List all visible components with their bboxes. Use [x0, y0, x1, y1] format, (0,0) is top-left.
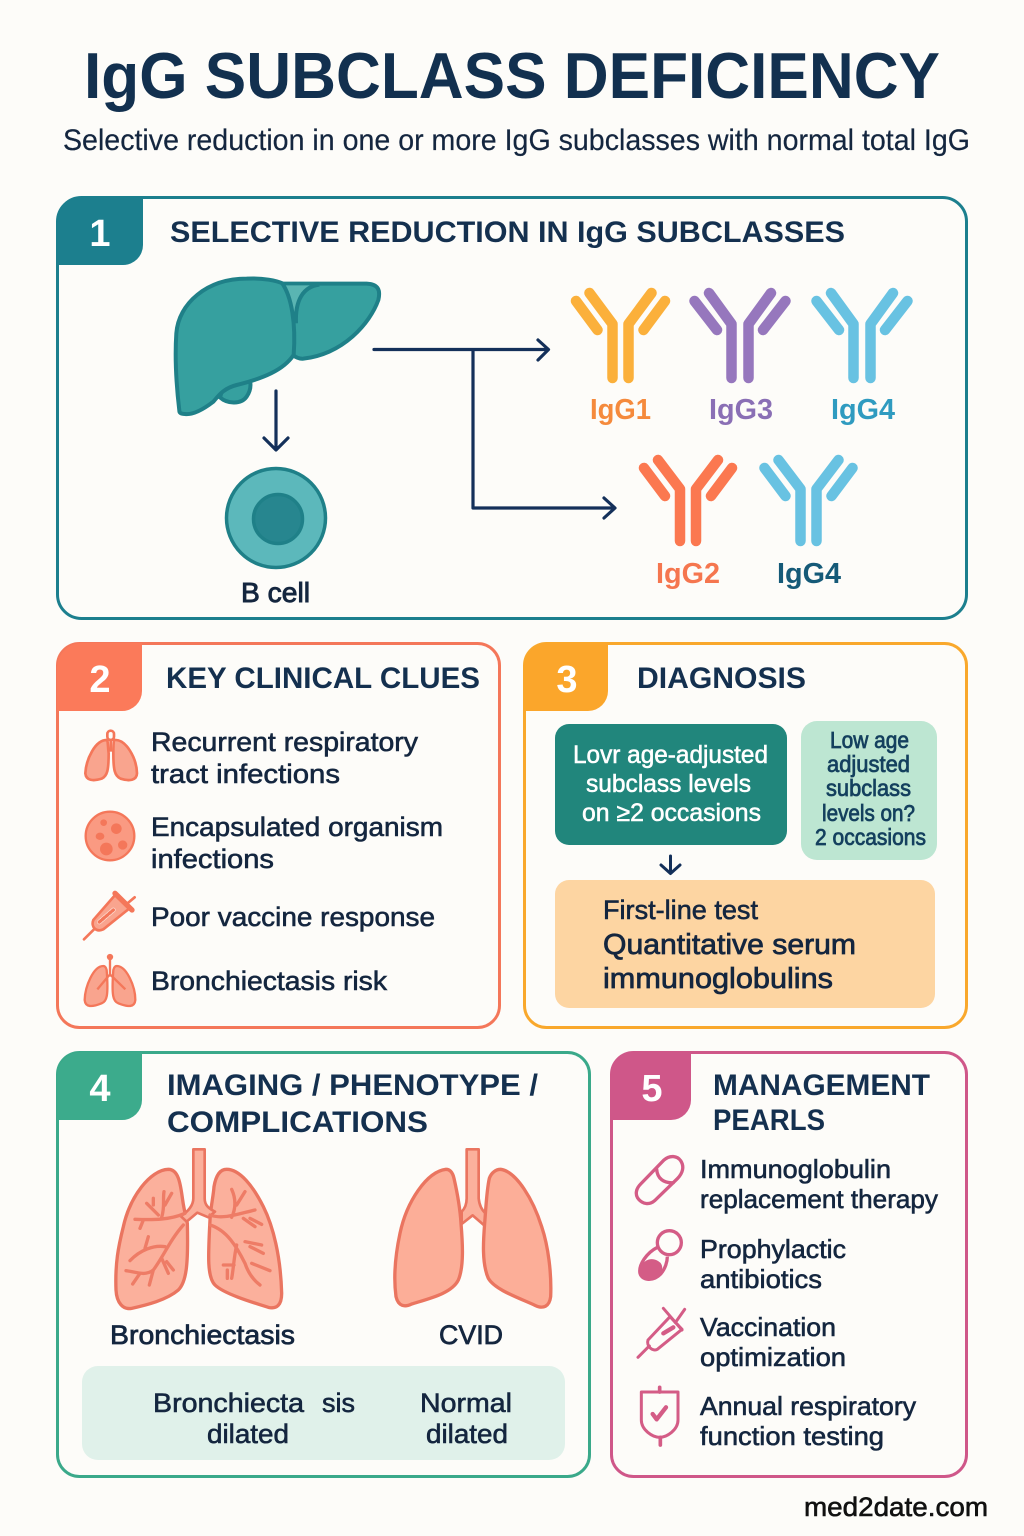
badge 1: 1	[89, 213, 111, 255]
title: IgG SUBCLASS DEFICIENCY	[84, 39, 940, 112]
box: low age adjusted levels (mint): levels on?	[822, 800, 915, 826]
icon: antibiotic capsule	[640, 1231, 681, 1279]
badge 5	[611, 1052, 691, 1120]
icon: organism	[86, 812, 134, 860]
box: low age adjusted levels (mint): adjusted	[827, 751, 910, 777]
antibody IgG3	[694, 293, 786, 426]
arrow: liver to B cell	[264, 391, 288, 450]
badge 3	[524, 643, 608, 711]
box: low age adjusted levels (mint): Low age	[830, 727, 909, 753]
icon: syringe	[84, 893, 135, 939]
icon: liver	[176, 278, 379, 414]
pearl: vaccination optimization: optimization	[700, 1342, 846, 1372]
box: low age-adjusted levels (teal): Lovr age-adjusted	[573, 741, 768, 769]
clue: recurrent respiratory infections	[85, 727, 419, 789]
antibody IgG4 lower: IgG4	[777, 558, 841, 590]
antibody IgG4 lower	[764, 460, 852, 590]
heading 4	[167, 1069, 539, 1139]
antibody IgG4 upper	[816, 293, 908, 426]
heading 3: DIAGNOSIS	[637, 662, 806, 695]
heading 5: PEARLS	[713, 1104, 825, 1137]
clue: encapsulated organism infections	[86, 812, 443, 874]
heading 1: SELECTIVE REDUCTION IN IgG SUBCLASSES	[170, 216, 845, 249]
illustration: CVID lungs	[395, 1149, 551, 1307]
arrow: branching to subclasses	[374, 340, 615, 518]
icon: vaccine syringe	[638, 1308, 685, 1357]
pearl: immunoglobulin replacement therapy: Immunoglobulin	[700, 1154, 891, 1184]
icon: lungs	[85, 731, 137, 780]
pearl: vaccination optimization	[638, 1308, 846, 1372]
antibody IgG4 upper: IgG4	[831, 394, 895, 426]
label: B cell: B cell	[241, 577, 310, 608]
icon: IV bag with check	[641, 1387, 678, 1445]
antibody IgG1	[576, 293, 665, 426]
pearl: prophylactic antibiotics	[640, 1231, 846, 1294]
badge 3: 3	[556, 659, 578, 701]
clue: poor vaccine response	[84, 893, 435, 939]
heading 4: COMPLICATIONS	[167, 1106, 428, 1139]
clue: recurrent respiratory infections: tract infections	[151, 759, 340, 789]
icon: B cell	[226, 468, 326, 568]
pearl: annual respiratory function testing	[641, 1387, 916, 1451]
icon: lungs with airways	[85, 955, 135, 1006]
pearl: annual respiratory function testing: function testing	[700, 1421, 884, 1451]
footer: source: med2date.com	[804, 1492, 988, 1522]
panel 4: imaging / phenotype / complications	[57, 1052, 590, 1476]
badge 4	[57, 1052, 142, 1120]
heading 5: MANAGEMENT	[713, 1069, 930, 1102]
box: first-line test: Quantitative serum	[603, 929, 856, 961]
heading 4: IMAGING / PHENOTYPE /	[167, 1069, 539, 1102]
antibody IgG1: IgG1	[590, 394, 651, 426]
clue: bronchiectasis risk: Bronchiectasis risk	[151, 966, 388, 996]
clue: bronchiectasis risk	[85, 955, 388, 1006]
box: comparison: Normal	[420, 1388, 512, 1418]
clue: recurrent respiratory infections: Recurrent respiratory	[151, 727, 419, 757]
badge 2	[57, 643, 142, 711]
box: low age adjusted levels (mint)	[801, 721, 937, 860]
box: low age-adjusted levels (teal)	[555, 724, 787, 845]
box: comparison: dilated	[426, 1419, 508, 1449]
pearl: prophylactic antibiotics: antibiotics	[700, 1264, 822, 1294]
badge 1	[57, 197, 143, 265]
box: low age-adjusted levels (teal): on ≥2 occasions	[582, 799, 761, 827]
clue: encapsulated organism infections: infections	[151, 844, 274, 874]
pearl: vaccination optimization: Vaccination	[700, 1312, 836, 1342]
box: first-line test	[555, 880, 935, 1008]
badge 4: 4	[89, 1068, 111, 1110]
antibody IgG3: IgG3	[709, 394, 773, 426]
subtitle: Selective reduction in one or more IgG subclasses with normal total IgG	[63, 124, 970, 157]
box: low age adjusted levels (mint): 2 occasions	[815, 824, 926, 850]
label: bronchiectasis: Bronchiectasis	[110, 1320, 295, 1350]
pearl: annual respiratory function testing: Annual respiratory	[700, 1391, 916, 1421]
arrow: diagnosis down	[661, 856, 680, 874]
panel 1: selective reduction	[57, 197, 966, 618]
box: comparison: sis	[322, 1388, 355, 1418]
box: comparison	[82, 1366, 565, 1460]
pearl: prophylactic antibiotics: Prophylactic	[700, 1234, 846, 1264]
box: low age-adjusted levels (teal): subclass levels	[586, 770, 751, 798]
heading 5	[713, 1069, 930, 1137]
panel 2: key clinical clues	[57, 643, 500, 1028]
antibody IgG2	[644, 460, 732, 590]
box: comparison: dilated	[207, 1419, 289, 1449]
heading 2: KEY CLINICAL CLUES	[166, 662, 480, 695]
label: CVID: CVID	[439, 1320, 503, 1350]
badge 5: 5	[641, 1068, 663, 1110]
box: first-line test: First-line test	[603, 895, 758, 925]
pearl: immunoglobulin replacement therapy: replacement therapy	[700, 1184, 938, 1214]
antibody IgG2: IgG2	[656, 558, 720, 590]
box: first-line test: immunoglobulins	[603, 963, 833, 995]
box: comparison: Bronchiecta	[153, 1388, 305, 1418]
clue: poor vaccine response: Poor vaccine response	[151, 902, 435, 932]
panel 3: diagnosis	[524, 643, 966, 1028]
box: low age adjusted levels (mint): subclass	[826, 775, 911, 801]
panel 5: management pearls	[611, 1052, 966, 1476]
badge 2: 2	[89, 659, 111, 701]
icon: capsule	[636, 1157, 683, 1204]
pearl: immunoglobulin replacement therapy	[636, 1154, 938, 1214]
clue: encapsulated organism infections: Encapsulated organism	[151, 812, 443, 842]
illustration: bronchiectasis lungs	[116, 1149, 282, 1309]
